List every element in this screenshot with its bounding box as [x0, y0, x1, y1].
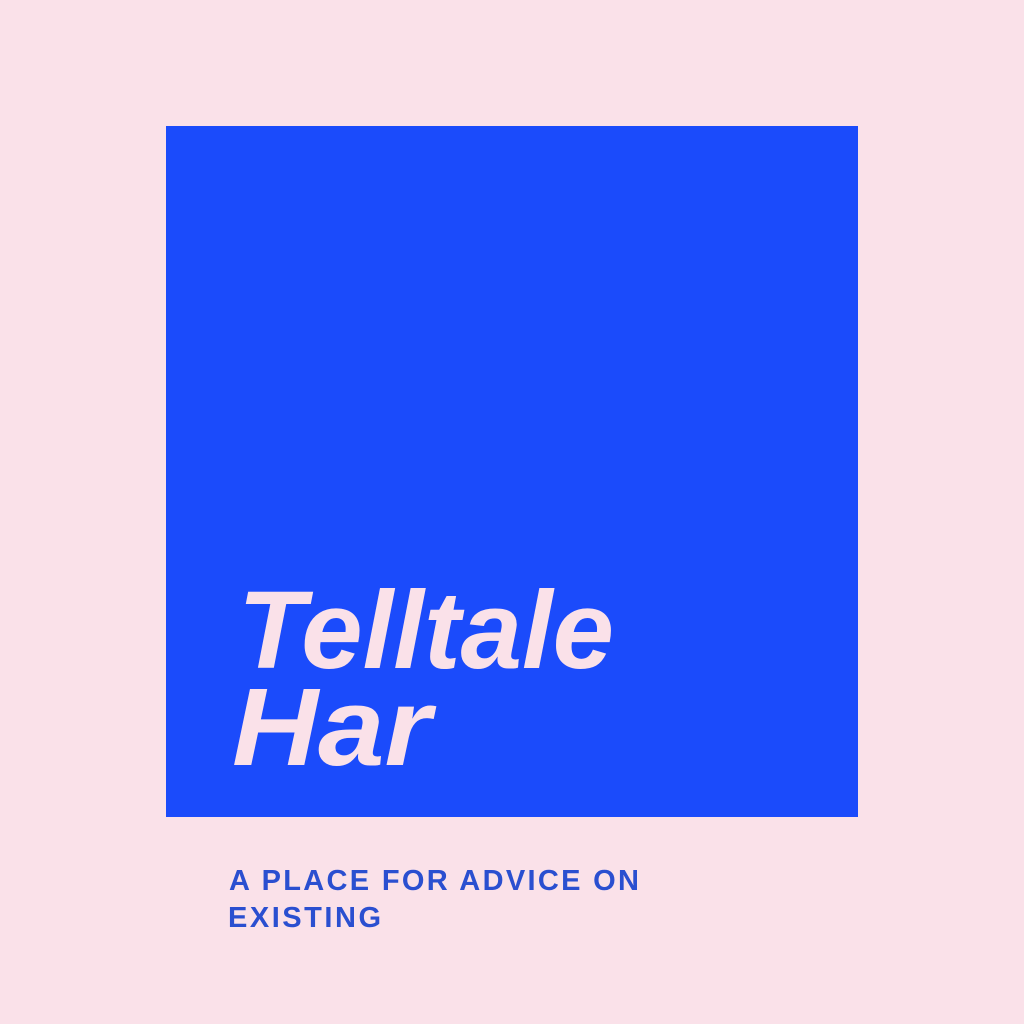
tagline line 2: EXISTING: [228, 902, 381, 934]
tagline line 1: A PLACE FOR ADVICE ON: [229, 865, 639, 897]
title line: Har: Har: [232, 666, 437, 789]
title: [232, 569, 614, 789]
tagline: [228, 865, 639, 934]
title line: Telltale: Telltale: [238, 569, 614, 692]
panel: blue square: [166, 126, 858, 817]
